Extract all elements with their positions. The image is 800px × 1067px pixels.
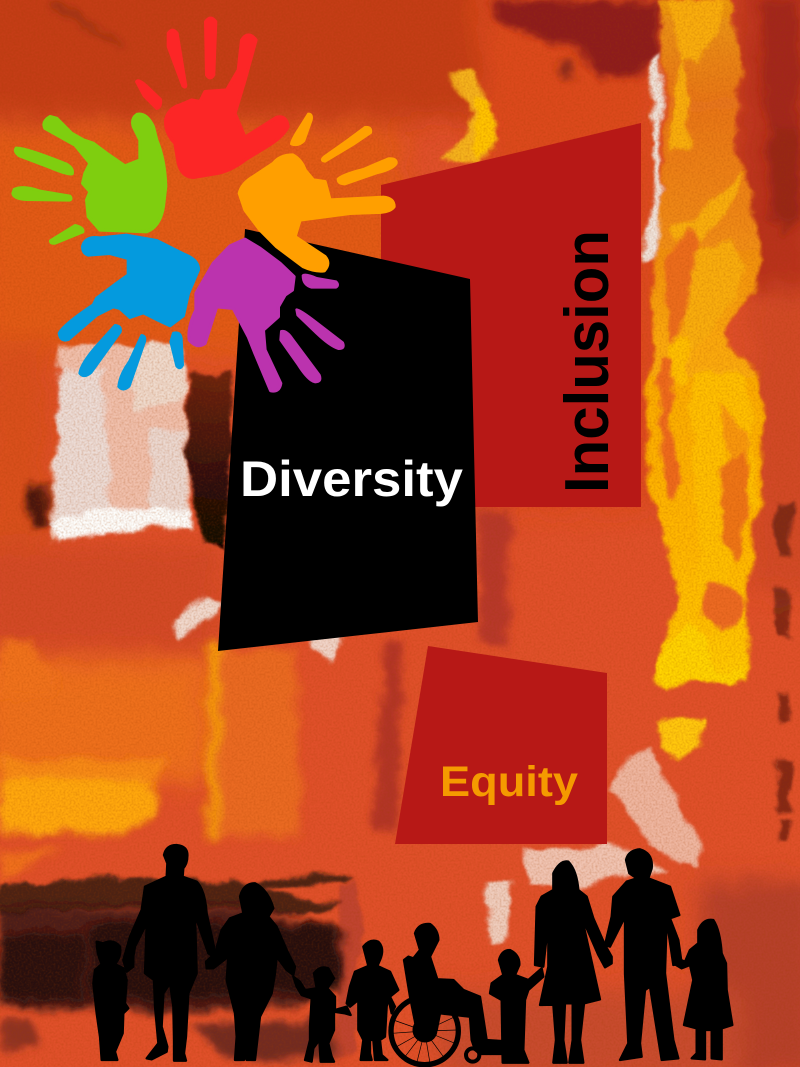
icon: red hand [136, 18, 288, 177]
dark paint marks [0, 370, 795, 1060]
maroon paint marks [50, 0, 800, 240]
black paint band behind left family [0, 874, 357, 916]
silhouette: woman [206, 883, 295, 1060]
silhouette: boy holding hands [490, 950, 543, 1063]
panel: equity [395, 646, 607, 844]
panel: diversity [218, 229, 478, 651]
icon: blue hand [59, 235, 198, 389]
silhouettes: wheelchair user and right family [391, 849, 732, 1065]
silhouette: child at far left [93, 941, 128, 1060]
silhouette: small child [293, 967, 351, 1062]
icon: purple hand [189, 239, 343, 391]
silhouette: woman in dress [535, 861, 612, 1063]
silhouette: man [605, 849, 682, 1060]
silhouette: girl [673, 920, 732, 1059]
silhouette: person in wheelchair [391, 924, 502, 1065]
label: Inclusion: Inclusion [553, 230, 622, 493]
icon: green hand [13, 114, 166, 243]
white paint patches [48, 345, 700, 945]
silhouettes: left family [93, 845, 398, 1062]
panel: inclusion [381, 123, 641, 507]
yellow paint streak [445, 0, 762, 758]
icon: orange hand [239, 114, 396, 271]
label: Equity: Equity [440, 758, 578, 806]
silhouette: boy [347, 941, 398, 1060]
label: Diversity: Diversity [240, 451, 463, 507]
silhouette: tall man [123, 845, 214, 1061]
icon: five colourful handprints [13, 18, 396, 391]
